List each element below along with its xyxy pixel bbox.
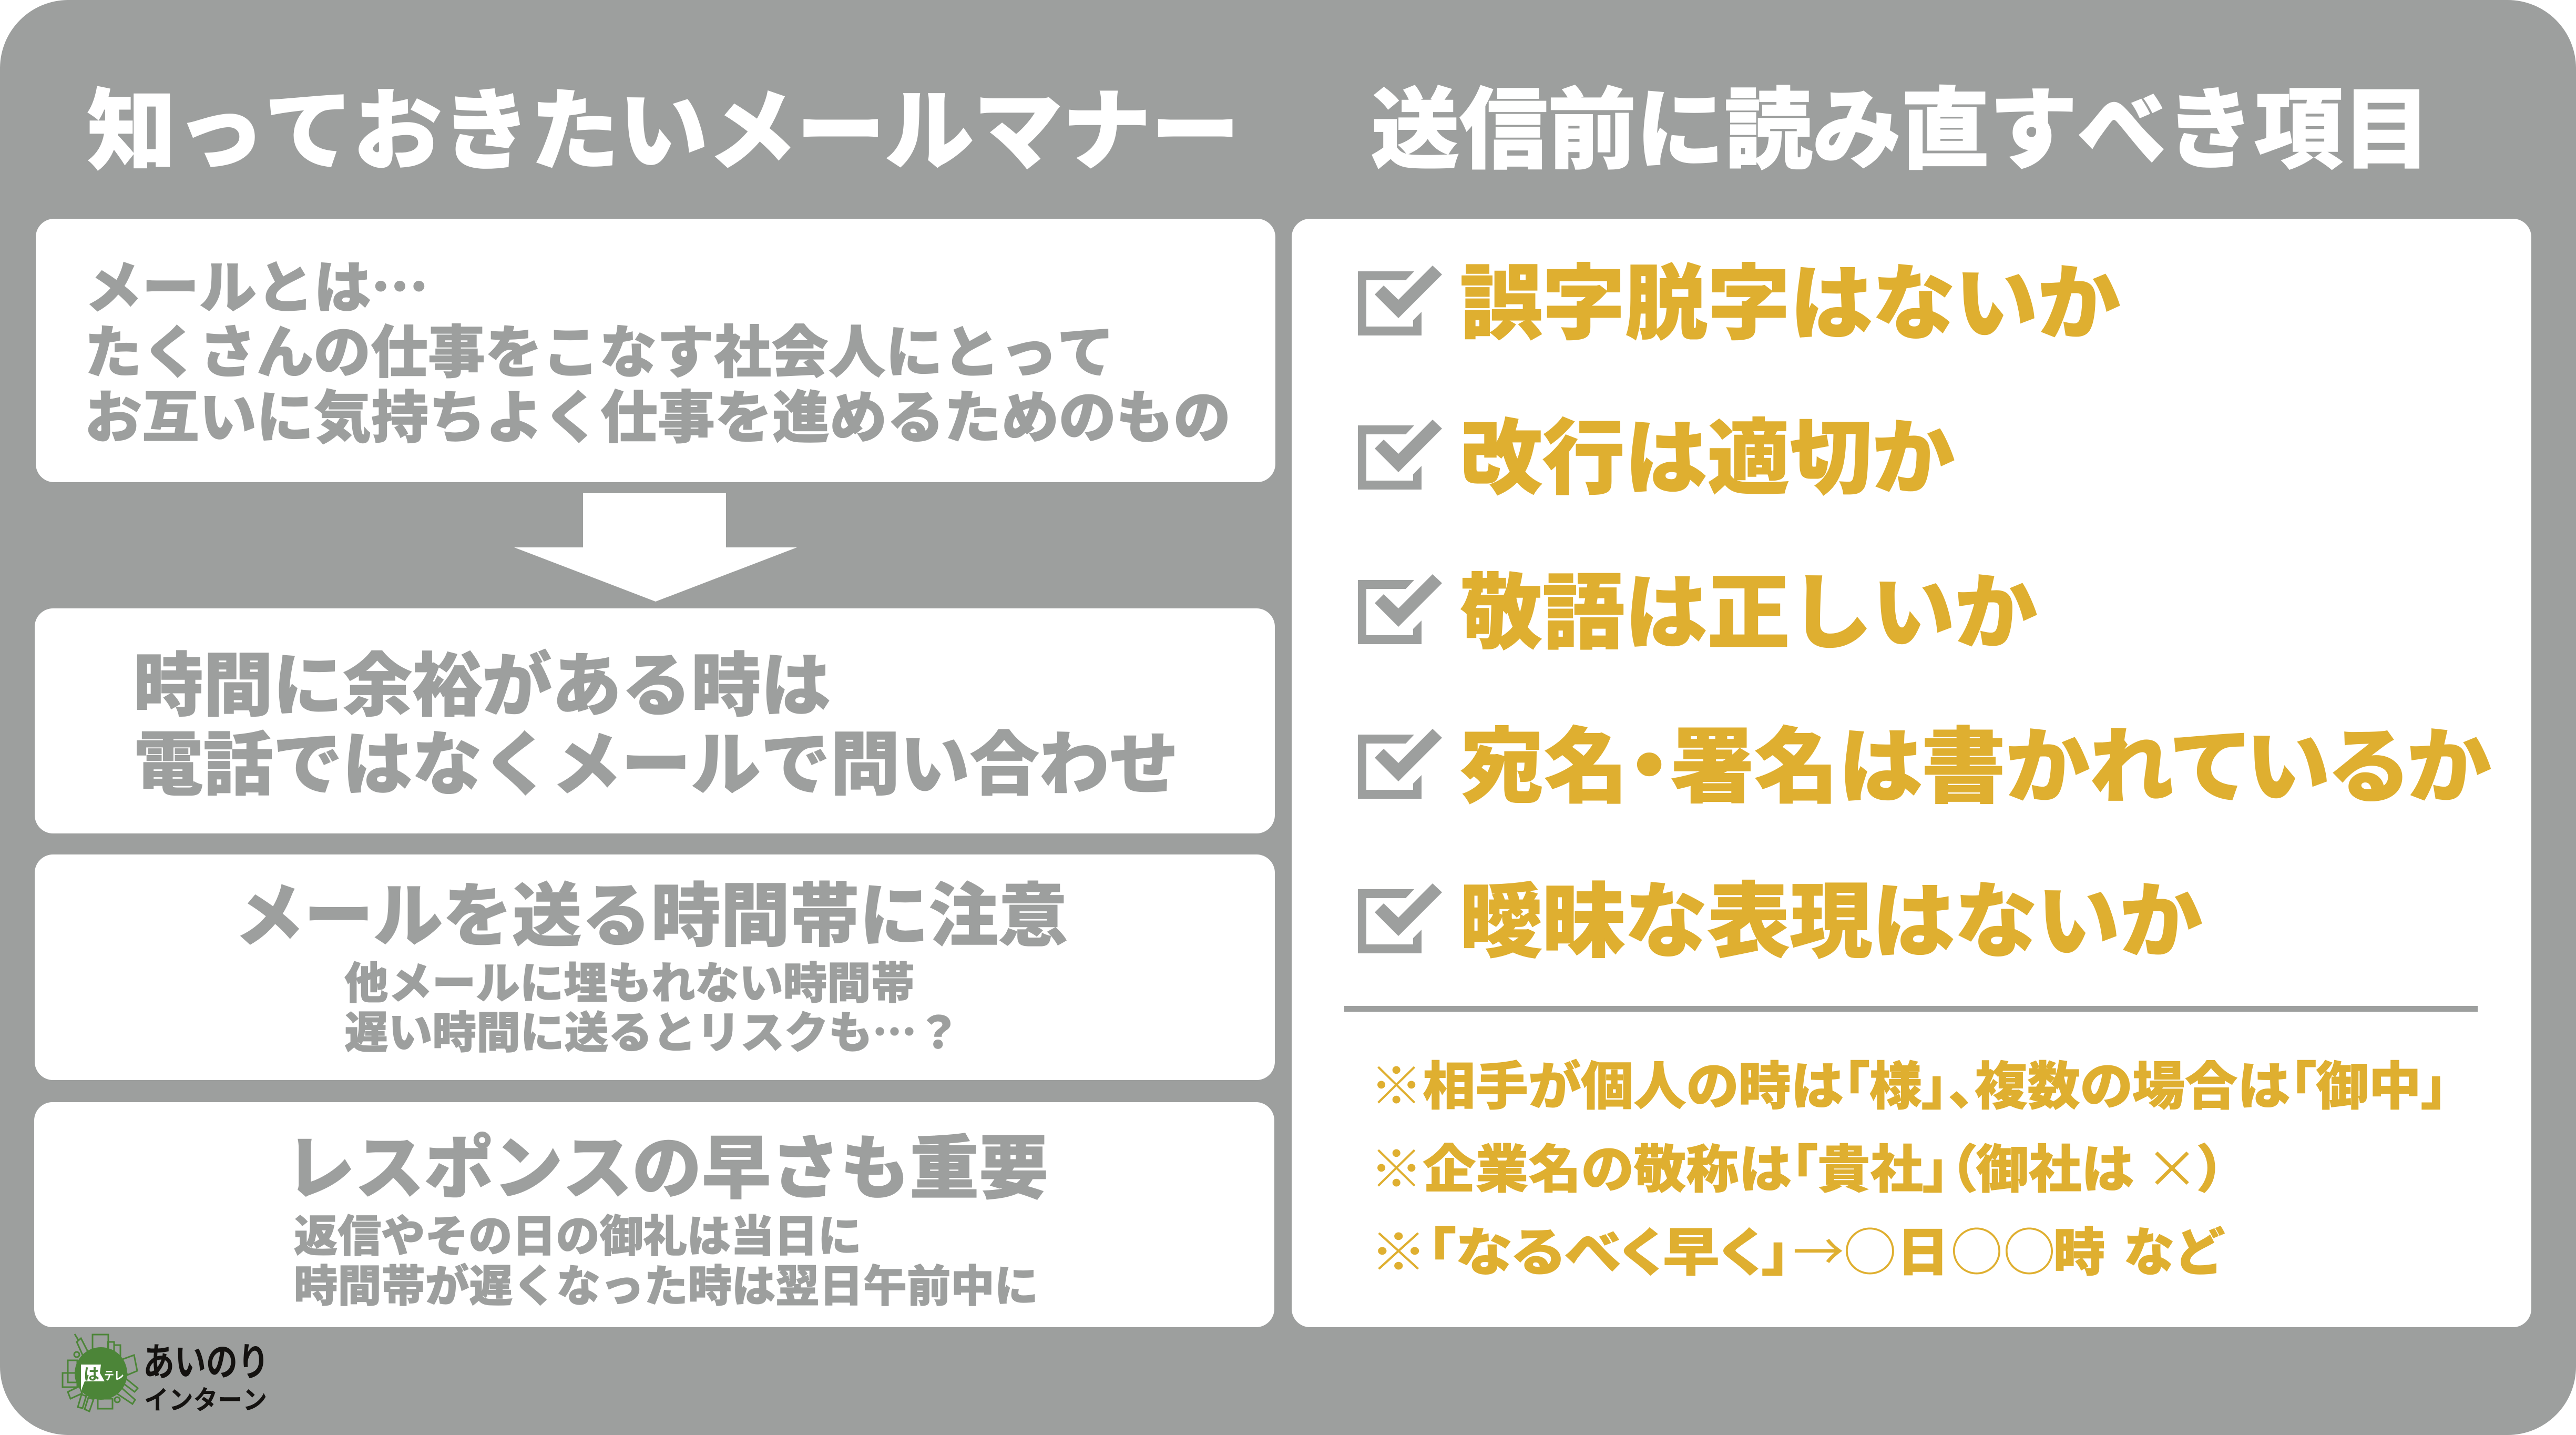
heading: items to reread before sending: 送信前に読み直すべき項目 [1371, 59, 2431, 187]
icon: checkbox [1358, 266, 1442, 335]
panel: response speed [34, 1102, 1274, 1327]
note 3: 時 [2053, 1211, 2105, 1286]
text: time of sending detail [344, 948, 960, 1061]
panel: time of sending [35, 854, 1275, 1080]
panel: checklist [1292, 219, 2531, 1327]
checklist item 1 [1358, 237, 2120, 356]
logo buildings [63, 1334, 138, 1411]
logo channel text: テレ [104, 1367, 124, 1383]
checklist item 3 [1358, 546, 2037, 665]
text: response speed detail: 返信やその日の御礼は当日に [294, 1201, 862, 1264]
logo: ainori intern [63, 1331, 269, 1417]
text: what email is: たくさんの仕事をこなす社会人にとって [85, 307, 1115, 389]
arrow: down [514, 493, 797, 602]
icon: checkbox [1358, 574, 1442, 644]
text: what email is: メールとは… [85, 242, 428, 324]
icon: checkbox [1358, 420, 1442, 490]
note 1: ※相手が個人の時は「様」、複数の場合は「御中」 [1370, 1045, 2448, 1119]
note 3: 日 [1897, 1211, 1949, 1286]
heading: time of sending: メールを送る時間帯に注意 [234, 860, 1068, 961]
heading: response speed: レスポンスの早さも重要 [285, 1113, 1048, 1213]
note 3: → [1793, 1211, 1844, 1286]
text: response speed detail [294, 1201, 1038, 1314]
icon: checkbox [1358, 883, 1442, 953]
checklist item 5 [1358, 855, 2202, 974]
note 3: ○ [1843, 1211, 1897, 1286]
heading: email manners: 知っておきたいメールマナー [87, 60, 1240, 188]
text: response speed detail: 時間帯が遅くなった時は翌日午前中に [294, 1251, 1038, 1314]
logo subtitle: インターン [144, 1379, 267, 1417]
text: what email is [85, 242, 1231, 454]
logo flag [81, 1365, 105, 1391]
text: time of sending detail: 他メールに埋もれない時間帯 [344, 948, 915, 1011]
note 3: など [2124, 1211, 2225, 1286]
logo wordmark: あいのり [143, 1331, 269, 1387]
text: item 4: 宛名・署名は書かれているか [1460, 700, 2491, 819]
logo circle [75, 1347, 127, 1400]
text: item 1: 誤字脱字はないか [1460, 237, 2120, 356]
text: use email rather than phone [134, 630, 1179, 809]
text: item 3: 敬語は正しいか [1460, 546, 2037, 665]
text: use email rather than phone: 電話ではなくメールで問い合わせ [134, 709, 1179, 809]
icon: checkbox [1358, 729, 1442, 799]
note 3: ○○ [1950, 1211, 2056, 1286]
note 3: ※「なるべく早く」 [1370, 1211, 1791, 1286]
logo flag text: は [84, 1361, 99, 1385]
text: item 2: 改行は適切か [1460, 392, 1955, 511]
note 2: ※企業名の敬称は「貴社」（御社は ×） [1370, 1128, 2225, 1203]
text: time of sending detail: 遅い時間に送るとリスクも…？ [344, 998, 960, 1061]
text: use email rather than phone: 時間に余裕がある時は [134, 630, 831, 730]
text: item 5: 曖昧な表現はないか [1460, 855, 2202, 974]
checklist item 4 [1358, 700, 2491, 819]
checklist item 2 [1358, 392, 1955, 511]
note 3 [1370, 1211, 2225, 1286]
panel: use email when there is time [35, 608, 1275, 833]
text: what email is: お互いに気持ちよく仕事を進めるためのもの [85, 372, 1231, 454]
panel: what email is [36, 219, 1275, 482]
